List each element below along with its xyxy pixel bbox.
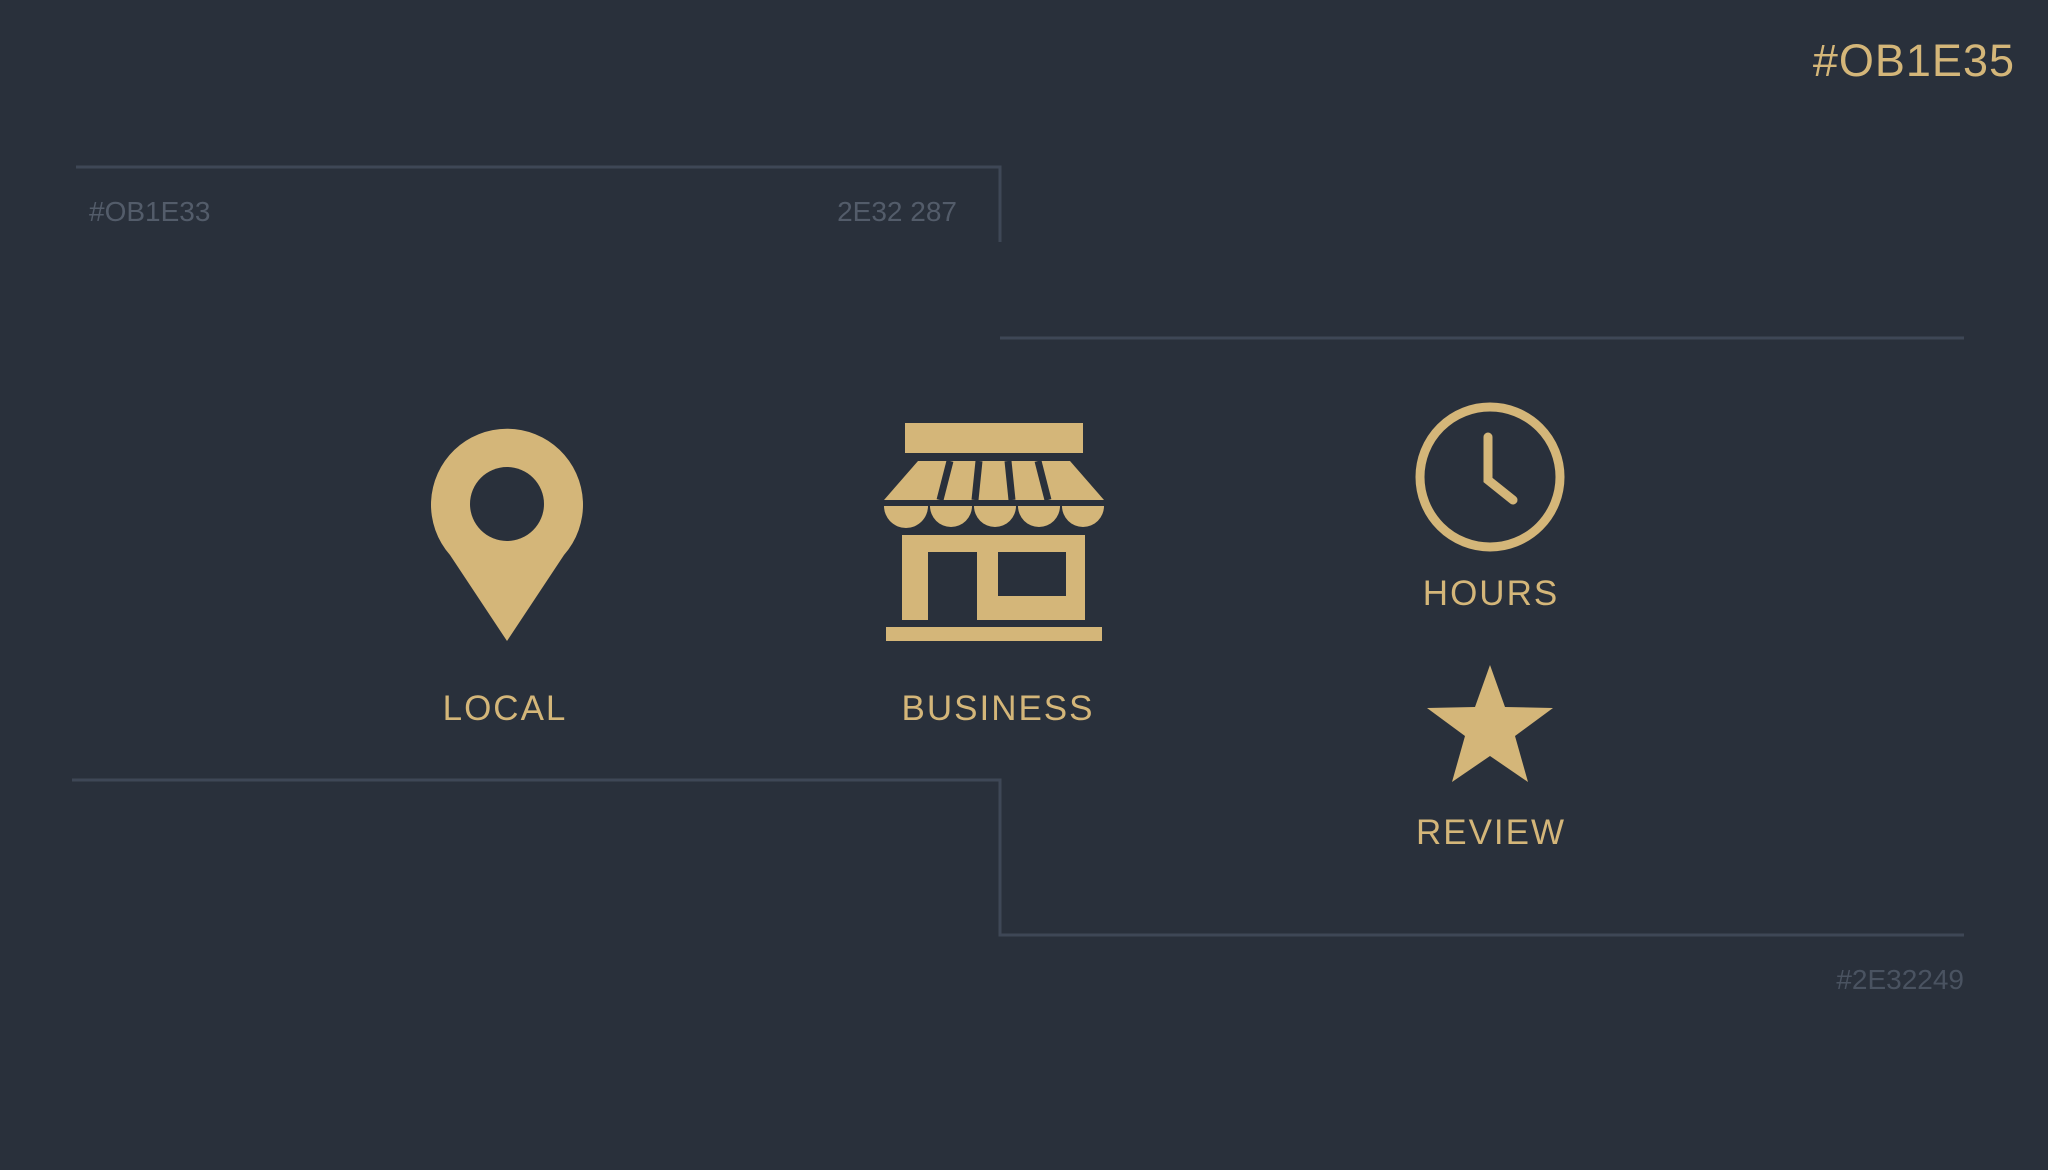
label: top-left code: #OB1E33 <box>89 196 210 227</box>
label: bottom-right code: #2E32249 <box>1836 964 1964 995</box>
icon: clock <box>1420 407 1560 547</box>
icon: location pin <box>431 429 583 641</box>
label: HOURS: HOURS <box>1423 574 1559 613</box>
label: LOCAL: LOCAL <box>443 689 567 728</box>
label: BUSINESS: BUSINESS <box>902 689 1094 728</box>
icon: star <box>1427 665 1553 782</box>
heading: top-right code: #OB1E35 <box>1813 35 2015 86</box>
icon: storefront <box>884 423 1104 641</box>
label: REVIEW: REVIEW <box>1416 813 1566 852</box>
label: top-right code in panel: 2E32 287 <box>837 196 957 227</box>
